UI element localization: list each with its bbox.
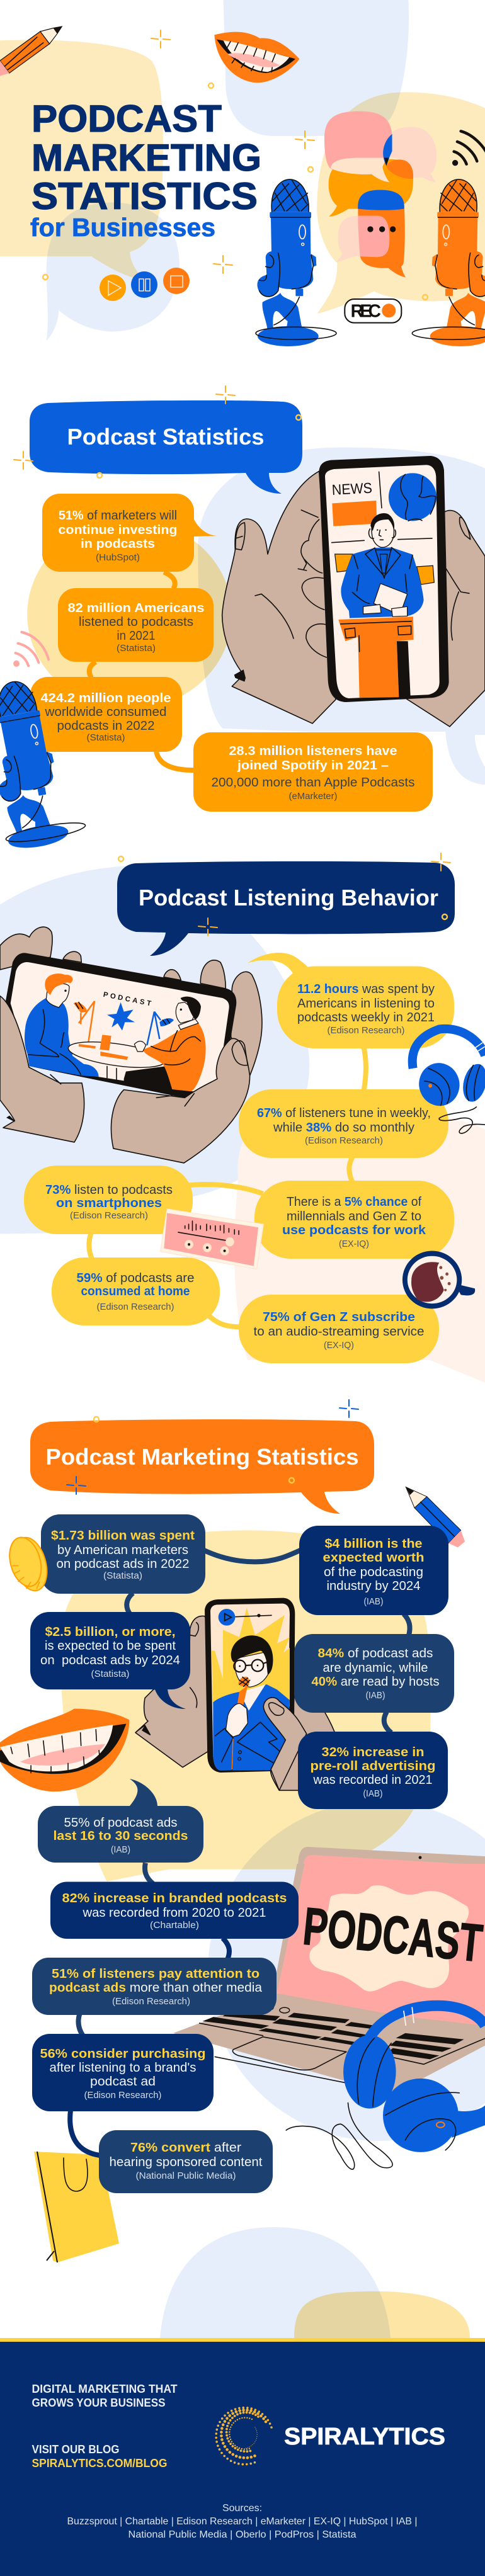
stat: 67% of listeners: (Edison Research) <box>305 1136 383 1146</box>
footer tagline <box>31 2383 178 2409</box>
stat: $4 billion <box>299 1526 448 1615</box>
stat: $1.73 billion: (Statista) <box>103 1571 142 1581</box>
stat: 28.3 million listeners: joined Spotify in 2021 – <box>237 759 389 773</box>
connectors <box>127 1550 410 1884</box>
stat: $4 billion: industry by 2024 <box>326 1579 421 1593</box>
stat: 59% at home: consumed at home <box>81 1285 190 1298</box>
stat: 67% of listeners <box>239 1089 448 1158</box>
panel: stats chain 2 <box>24 953 454 1363</box>
stat: 32% pre-roll: (IAB) <box>363 1789 383 1799</box>
stat: 84% dynamic ads: (IAB) <box>365 1691 385 1701</box>
stat: 28.3 million listeners: 28.3 million listeners have <box>229 744 397 758</box>
icon: pink wifi signal <box>13 632 48 667</box>
stat: 11.2 hours: 11.2 hours was spent by <box>297 982 435 996</box>
blog call to action: SPIRALYTICS.COM/BLOG <box>31 2457 168 2470</box>
heading text: Podcast Statistics <box>67 424 265 450</box>
stat: 32% pre-roll: was recorded in 2021 <box>313 1773 432 1787</box>
background shapes: section 2 <box>0 865 485 1383</box>
stat: 51% of listeners <box>32 1958 277 2015</box>
stat: 5% chance: There is a 5% chance of <box>287 1195 421 1209</box>
stat: $2.5 billion: on podcast ads by 2024 <box>40 1654 180 1667</box>
title: PODCAST <box>31 98 222 140</box>
illustration: laptop with podcast screen <box>173 1847 485 2094</box>
icon: coffee cup <box>402 1251 475 1308</box>
stat: $4 billion: $4 billion is the <box>325 1537 422 1551</box>
blog call to action <box>31 2443 168 2470</box>
logo: spiral mark <box>216 2408 271 2465</box>
stat: $2.5 billion: (Statista) <box>91 1669 130 1679</box>
stat: 55% of ads <box>38 1779 203 1863</box>
stat: 51% of marketers: in podcasts <box>81 537 155 551</box>
icon: large headphones <box>286 2006 485 2169</box>
icon: gold coin <box>4 1533 52 1595</box>
panel: podcast listening behavior heading <box>117 861 455 956</box>
stat: 82 million Americans: in 2021 <box>117 629 155 643</box>
stat: 55% of ads: 55% of podcast ads <box>64 1816 178 1830</box>
connectors <box>89 1046 366 1327</box>
stat: 424.2 million people <box>30 677 182 752</box>
stat: 56% consider purchasing <box>32 2034 214 2111</box>
stat: 51% of listeners: (Edison Research) <box>112 1997 190 2007</box>
stat: 82 million Americans <box>58 588 214 662</box>
stat: $1.73 billion: by American marketers <box>57 1543 188 1557</box>
background shapes: section 1 <box>27 448 485 785</box>
icon: tilted blue microphone <box>0 674 88 852</box>
stat: 55% of ads: last 16 to 30 seconds <box>53 1829 188 1843</box>
stat: 5% chance <box>254 1181 454 1259</box>
panel: stats chain 4 <box>32 1881 299 2193</box>
stat: 84% dynamic ads <box>294 1634 454 1713</box>
stat: 55% of ads: (IAB) <box>111 1845 130 1855</box>
stat: 28.3 million listeners: (eMarketer) <box>288 792 338 802</box>
stat: 59% at home <box>52 1257 220 1325</box>
stat: 51% of marketers: continue investing <box>58 523 178 537</box>
stat: $1.73 billion <box>41 1514 205 1594</box>
stat: 51% of listeners: 51% of listeners pay attention to <box>52 1967 260 1981</box>
stat: 73% on smartphones: 73% listen to podcasts <box>45 1183 173 1197</box>
stat: 51% of marketers <box>42 494 218 572</box>
stat: 32% pre-roll: 32% increase in <box>321 1745 425 1759</box>
stat: 424.2 million people: (Statista) <box>87 733 125 743</box>
footer tagline: GROWS YOUR BUSINESS <box>31 2397 165 2409</box>
stat: 75% of Gen Z: 75% of Gen Z subscribe <box>263 1310 415 1324</box>
stat: 82% increase: (Chartable) <box>150 1921 199 1931</box>
icon: pink audio player <box>160 1209 263 1269</box>
stat: 424.2 million people: podcasts in 2022 <box>57 719 155 733</box>
heading text: Podcast Listening Behavior <box>139 885 438 911</box>
stat: 56% consider purchasing: 56% consider purchasing <box>40 2047 205 2061</box>
stat: 76% convert: hearing sponsored content <box>110 2155 263 2169</box>
sources: Sources: <box>222 2503 262 2514</box>
stat: 76% convert: 76% convert after <box>130 2141 241 2155</box>
illustration: hand holding phone with speaker <box>135 1598 335 1790</box>
speech bubbles cluster <box>324 111 437 278</box>
icon: large lips <box>0 1709 129 1791</box>
panel: podcast marketing statistics heading <box>30 1419 374 1514</box>
stat: 59% at home: 59% of podcasts are <box>77 1271 194 1285</box>
stat: 424.2 million people: worldwide consumed <box>44 705 167 719</box>
icon: orange lips <box>214 32 299 82</box>
background shapes: section 3 <box>60 1530 485 2141</box>
stat: $2.5 billion: $2.5 billion, or more, <box>45 1625 175 1639</box>
stat: 76% convert: (National Public Media) <box>136 2171 236 2181</box>
stat: 84% dynamic ads: 84% of podcast ads <box>317 1647 433 1660</box>
stat: 32% pre-roll <box>298 1732 448 1809</box>
stat: 75% of Gen Z <box>239 1295 439 1363</box>
icon: yellow shopping bag <box>34 2152 119 2262</box>
title: MARKETING <box>31 137 261 179</box>
stat: 5% chance: millennials and Gen Z to <box>287 1210 421 1223</box>
stat: $4 billion: of the podcasting <box>324 1565 423 1579</box>
background shapes: above footer <box>160 2227 470 2338</box>
stat: 73% on smartphones: (Edison Research) <box>70 1211 148 1221</box>
stat: 84% dynamic ads: 40% are read by hosts <box>311 1675 440 1689</box>
icon: blue headphones <box>413 1029 485 1133</box>
stat: 75% of Gen Z: to an audio-streaming service <box>253 1325 425 1339</box>
background shapes: hero <box>0 0 485 341</box>
stat: 59% at home: (Edison Research) <box>97 1302 174 1312</box>
stat: $1.73 billion: $1.73 billion was spent <box>51 1529 195 1543</box>
icon: orange pencil <box>0 26 62 76</box>
sparkles and rings <box>14 30 450 1494</box>
stat: 73% on smartphones: on smartphones <box>56 1196 162 1210</box>
stat: 28.3 million listeners: 200,000 more than Apple Podcasts <box>212 776 414 790</box>
footer tagline: DIGITAL MARKETING THAT <box>31 2383 178 2395</box>
illustration: hands holding phone with news <box>222 456 485 727</box>
stat: 67% of listeners: while 38% do so monthly <box>273 1121 414 1135</box>
sources <box>67 2503 417 2540</box>
blog call to action: VISIT OUR BLOG <box>31 2443 120 2456</box>
stat: 11.2 hours: (Edison Research) <box>328 1026 404 1036</box>
stat: 56% consider purchasing: podcast ad <box>90 2075 156 2089</box>
sources: National Public Media | Oberlo | PodPros | Statista <box>128 2529 357 2540</box>
panel: stats chain 1 <box>30 494 433 812</box>
connectors <box>89 572 195 770</box>
stat: 11.2 hours <box>248 953 454 1048</box>
stat: 424.2 million people: 424.2 million people <box>40 691 171 705</box>
footer band <box>0 2338 485 2576</box>
stat: 84% dynamic ads: are dynamic, while <box>322 1661 428 1675</box>
stat: 5% chance: (EX-IQ) <box>339 1239 369 1249</box>
stat: 51% of marketers: 51% of marketers will <box>59 509 177 523</box>
stat: $4 billion: (IAB) <box>364 1597 383 1607</box>
stat: 56% consider purchasing: after listening to a brand's <box>49 2061 197 2075</box>
stat: 82 million Americans: listened to podcasts <box>79 615 193 629</box>
stat: 51% of listeners: podcast ads more than other media <box>49 1981 263 1995</box>
stat: 75% of Gen Z: (EX-IQ) <box>324 1341 354 1351</box>
panel: stats chain 3 <box>30 1514 454 1884</box>
sources: Buzzsprout | Chartable | Edison Research | eMarketer | EX-IQ | HubSpot | IAB | <box>67 2516 417 2527</box>
stat: 73% on smartphones <box>24 1166 193 1234</box>
icon: REC badge <box>345 299 401 323</box>
stat: 56% consider purchasing: (Edison Research) <box>84 2091 161 2101</box>
title: for Businesses <box>30 213 215 242</box>
connectors <box>70 1938 229 2155</box>
icon: blue pencil <box>406 1487 465 1547</box>
stat: 82 million Americans: (Statista) <box>117 644 156 654</box>
stat: 82% increase: 82% increase in branded podcasts <box>62 1892 287 1905</box>
stat: $4 billion: expected worth <box>322 1551 425 1565</box>
stat: $2.5 billion <box>30 1612 190 1709</box>
stat: $1.73 billion: on podcast ads in 2022 <box>57 1557 189 1571</box>
title: STATISTICS <box>31 175 258 217</box>
heading text: Podcast Marketing Statistics <box>45 1444 359 1470</box>
panel: podcast statistics heading <box>30 400 302 494</box>
stat: 82 million Americans: 82 million Americans <box>68 601 204 615</box>
stat: 67% of listeners: 67% of listeners tune in weekly, <box>257 1106 431 1120</box>
stat: 5% chance: use podcasts for work <box>282 1223 426 1237</box>
illustration: hands holding phone with podcast scene <box>0 927 262 1163</box>
title <box>30 98 261 242</box>
stat: 11.2 hours: podcasts weekly in 2021 <box>297 1011 435 1024</box>
stat: 82% increase: was recorded from 2020 to 2021 <box>82 1906 266 1920</box>
stat: 82% increase <box>50 1881 299 1939</box>
stat: $2.5 billion: is expected to be spent <box>45 1639 176 1653</box>
icon: orange microphone <box>412 179 485 346</box>
logo: wordmark: SPIRALYTICS <box>284 2424 445 2450</box>
stat: 32% pre-roll: pre-roll advertising <box>310 1759 436 1773</box>
icons: play pause stop buttons <box>100 268 190 301</box>
icon: wifi signal <box>452 131 485 166</box>
stat: 76% convert <box>99 2130 273 2193</box>
stat: 51% of marketers: (HubSpot) <box>96 553 140 563</box>
stat: 11.2 hours: Americans in listening to <box>297 997 435 1011</box>
icon: REC badge: REC <box>351 301 381 321</box>
illustration: hands holding phone with news: NEWS <box>331 480 372 498</box>
icon: blue microphone <box>256 179 336 346</box>
illustration: hands holding phone with podcast scene: PODCAST <box>103 991 152 1007</box>
stat: 28.3 million listeners <box>193 732 433 812</box>
